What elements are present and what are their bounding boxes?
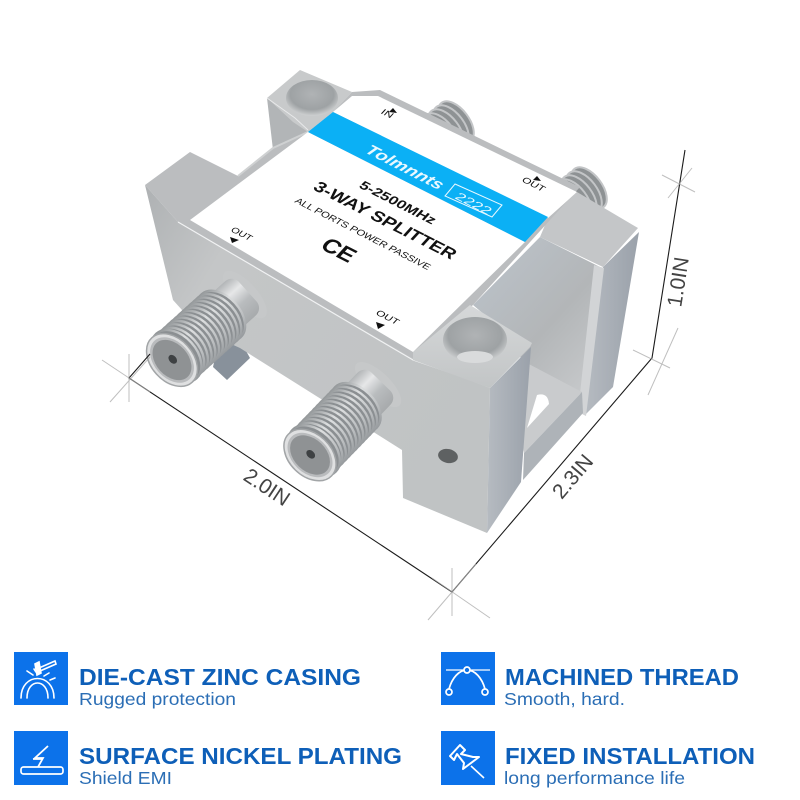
product title: 3-WAY SPLITTER — [309, 178, 462, 263]
CE mark: CE — [316, 233, 362, 267]
back connector: IN — [416, 95, 481, 161]
front connector right — [274, 355, 408, 491]
rear left mounting block — [267, 70, 352, 150]
heading: SURFACE NICKEL PLATING — [79, 743, 402, 769]
heading: DIE-CAST ZINC CASING — [79, 664, 361, 690]
feature: die-cast zinc casing — [14, 652, 361, 709]
feature: machined thread — [441, 652, 739, 709]
printed label — [190, 96, 577, 352]
icon: plating bolt — [14, 731, 68, 785]
wall top highlight line — [178, 222, 490, 386]
model box: 2222 — [452, 190, 495, 217]
dimension: height: 1.0IN — [663, 255, 694, 309]
feature: fixed installation — [441, 731, 755, 788]
port label: rear OUT: OUT — [520, 175, 548, 194]
heading: MACHINED THREAD — [505, 664, 739, 690]
recess with bracket — [473, 237, 604, 480]
dimension: width: 2.0IN — [239, 464, 294, 511]
port label: IN: IN — [379, 107, 396, 120]
product: 3-way splitter — [136, 70, 639, 533]
feature: surface nickel plating — [14, 731, 402, 788]
heading: FIXED INSTALLATION — [505, 743, 755, 769]
mounting foot — [213, 335, 250, 380]
front housing wall — [145, 185, 490, 533]
dimension lines — [102, 150, 695, 620]
side screw hole — [437, 447, 459, 465]
model box — [445, 184, 502, 217]
icon: push pin — [441, 731, 495, 785]
port label: front OUT: OUT — [374, 308, 402, 327]
blue label band — [308, 112, 548, 242]
icon: bezier curve — [441, 652, 495, 705]
port label: left OUT: OUT — [229, 225, 255, 243]
back connector: OUT — [549, 161, 614, 227]
port label: front OUT — [374, 308, 402, 329]
subtext: Shield EMI — [79, 768, 172, 788]
subtext: long performance life — [504, 768, 685, 788]
front right block — [413, 305, 532, 533]
frequency text: 5-2500MHz — [356, 179, 440, 227]
label subtitle: ALL PORTS POWER PASSIVE — [292, 196, 433, 272]
left housing highlight — [238, 132, 308, 176]
front connector left — [136, 264, 274, 396]
subtext: Rugged protection — [79, 689, 236, 709]
icon: hammer on arc — [14, 652, 68, 705]
rear right mounting block — [540, 192, 639, 415]
subtext: Smooth, hard. — [504, 689, 625, 709]
top rim of housing — [145, 90, 580, 388]
brand name: Tolmnnts — [361, 142, 448, 193]
dimension: depth: 2.3IN — [548, 450, 598, 503]
